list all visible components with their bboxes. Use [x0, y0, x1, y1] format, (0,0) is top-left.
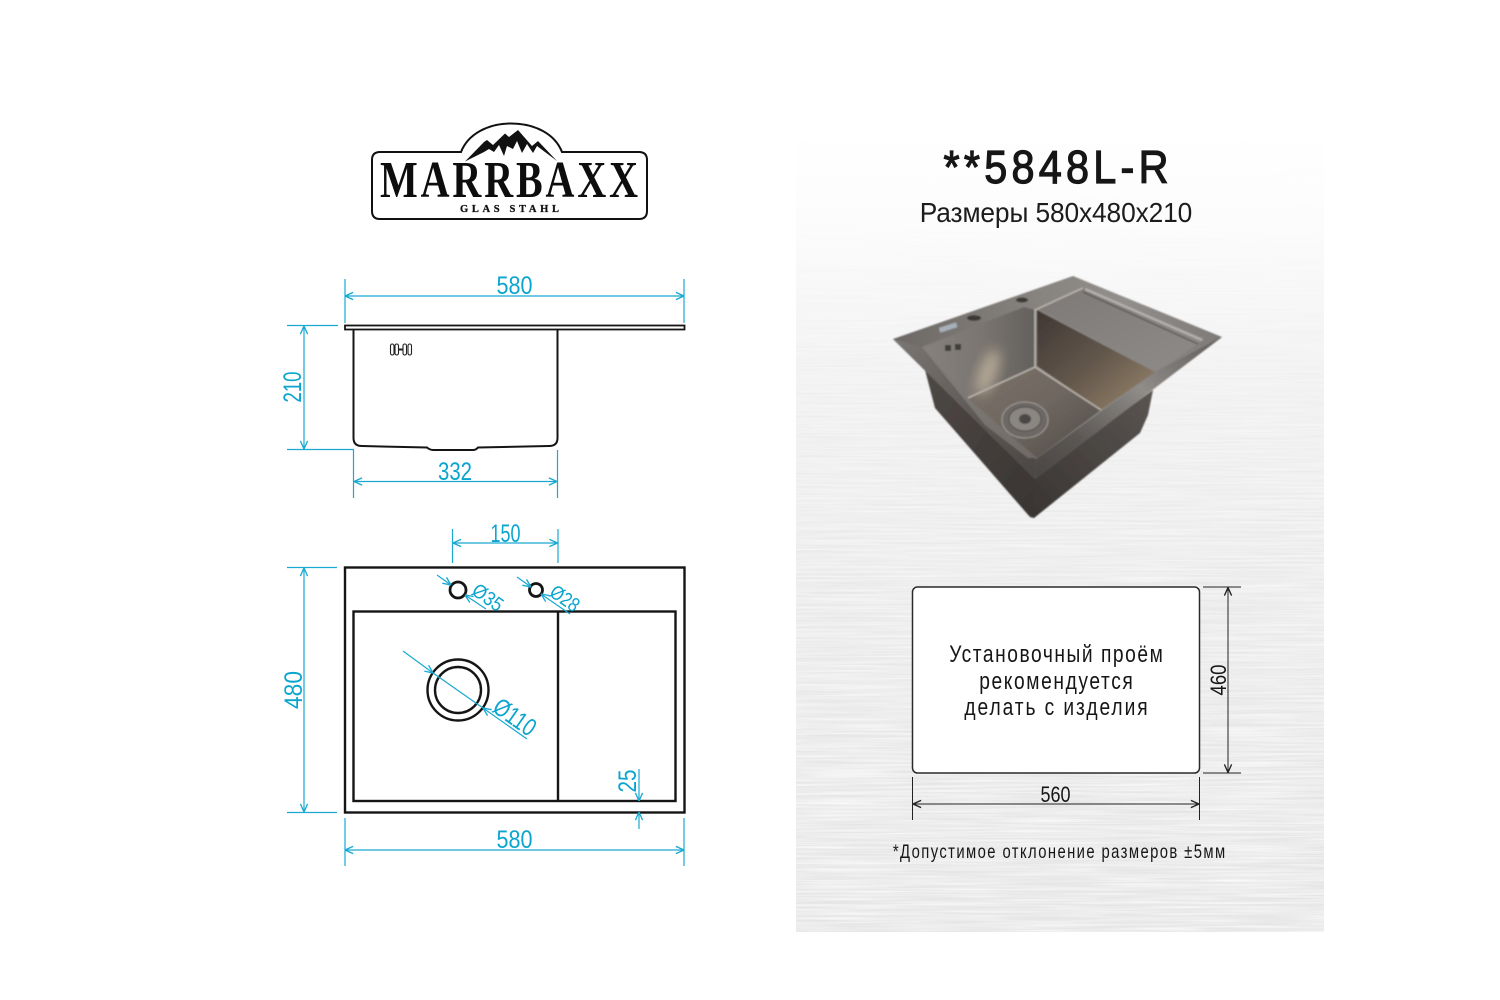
bowl floor: [968, 367, 1101, 458]
title: model: **5848L-R: [943, 142, 1169, 194]
installation cutout: [912, 587, 1200, 773]
dimension: depth 480: [280, 568, 337, 812]
outer body right: [1030, 390, 1153, 518]
dimension: offset 25: 25: [614, 770, 642, 792]
rail shadow: [1083, 292, 1198, 344]
cutout text: рекомендуется: [979, 667, 1133, 695]
footnote: *Допустимое отклонение размеров ±5мм: [893, 841, 1225, 862]
dimension: cutout width 560: 560: [1040, 782, 1070, 807]
outer body left: [925, 370, 1037, 517]
sink photo: [893, 276, 1222, 518]
dimension: cutout width 560: [912, 777, 1200, 820]
overflow slots: [390, 344, 412, 355]
dimension: offset 25: [614, 769, 642, 829]
cutout text: [949, 640, 1163, 721]
faucet hole 35: [450, 582, 466, 598]
dimension: drain diameter 110: Ø110: [488, 693, 541, 742]
brushed metal panel: [796, 266, 1324, 932]
dimension: top view width 580: [345, 818, 684, 866]
bowl outline: [354, 612, 676, 801]
front right rim band: [1035, 337, 1222, 479]
back left wall: [922, 307, 1035, 398]
highlight: [971, 346, 1005, 398]
front left wall: [922, 347, 1037, 458]
dimension: cutout height 460: [1203, 587, 1241, 773]
dimension: cutout height 460: 460: [1206, 664, 1231, 696]
divider wall: [1037, 310, 1155, 410]
drain strainer: [1002, 402, 1048, 438]
sink bowl: [354, 330, 558, 450]
side view drawing: [345, 326, 684, 450]
rim: [893, 276, 1222, 479]
logo wordmark: MARRBAXX: [380, 152, 638, 209]
cutout text: делать с изделия: [964, 693, 1148, 721]
drain hole: [428, 660, 488, 720]
subtitle: dimensions: Размеры 580х480х210: [920, 196, 1192, 228]
dimension: depth 210: [279, 326, 354, 498]
icon: mountains: [465, 130, 557, 162]
dimension: depth 480: 480: [280, 671, 308, 709]
seams: [968, 288, 1101, 410]
dimension: top view width 580: 580: [496, 826, 532, 854]
dimension: drain diameter 110: [403, 651, 541, 742]
dimension: side width 580: [345, 272, 684, 323]
dimension: diameter 28: [517, 577, 583, 617]
shelf: [1037, 288, 1205, 372]
dimension: bowl width 332: 332: [438, 458, 472, 486]
sink rim: [345, 326, 684, 330]
logo tagline: GLAS STAHL: [460, 204, 559, 215]
drainboard rail: [1085, 289, 1202, 340]
logo: Marrbaxx: [372, 124, 647, 219]
front left rim band: [893, 339, 1036, 479]
cutout text: Установочный проём: [949, 640, 1163, 668]
dimension: depth 210: 210: [279, 372, 307, 402]
dimension: side width 580: 580: [496, 272, 532, 300]
stamp marks: [945, 344, 961, 351]
dimension: hole spacing 150: 150: [490, 520, 520, 548]
dimension: diameter 28: Ø28: [545, 581, 583, 617]
dimension: diameter 35: [437, 575, 507, 617]
divider: [557, 612, 559, 801]
dimension: diameter 35: Ø35: [468, 580, 507, 617]
top view drawing: [345, 568, 684, 812]
dimension: hole spacing 150: [452, 520, 558, 563]
faucet hole 28: [530, 584, 542, 596]
sink outline: [345, 568, 684, 812]
faucet holes on rim: [939, 298, 1028, 333]
